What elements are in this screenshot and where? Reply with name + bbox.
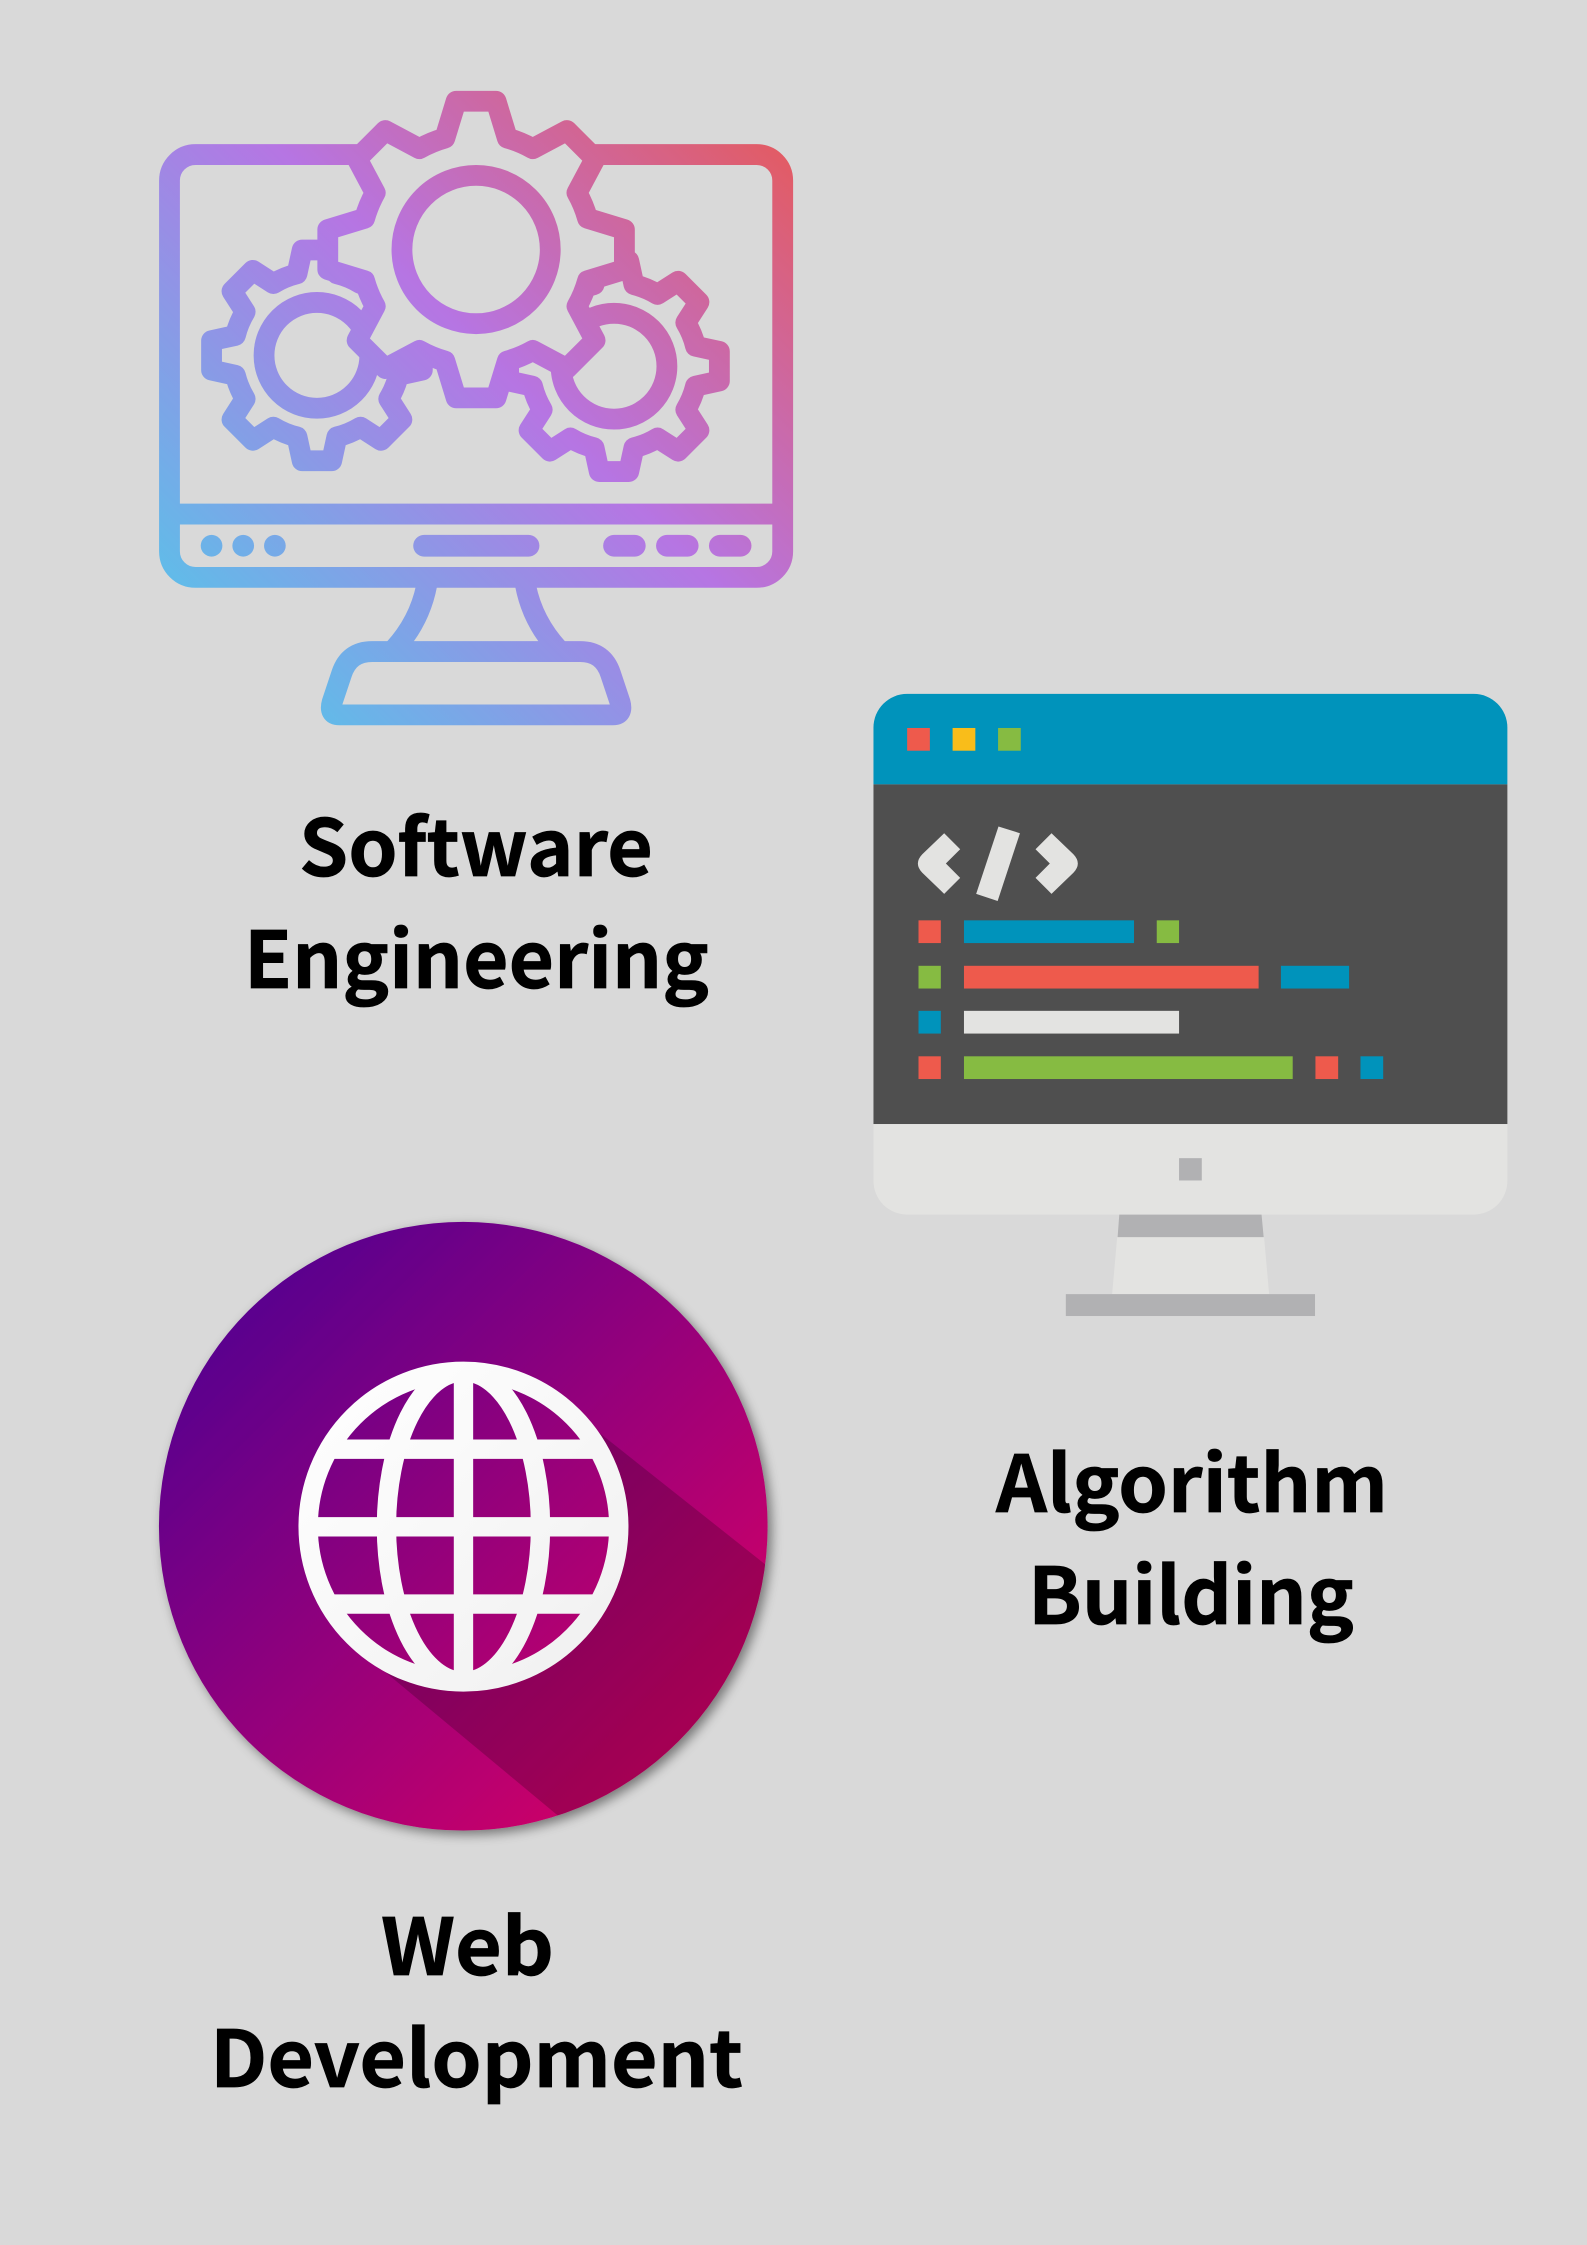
heading: Software Engineering: Engineering xyxy=(244,899,709,1011)
long shadow xyxy=(386,1432,765,1816)
icon: code editor monitor xyxy=(873,694,1507,1316)
icon: globe badge xyxy=(159,1222,797,1836)
power button xyxy=(1179,1158,1202,1180)
base xyxy=(1066,1294,1315,1316)
globe interior xyxy=(308,1371,619,1682)
heading: Software Engineering xyxy=(244,787,709,1011)
code symbol xyxy=(918,826,1078,901)
heading: Web Development: Development xyxy=(210,1998,743,2110)
heading: Software Engineering: Software xyxy=(299,787,653,899)
icon: monitor with gears xyxy=(159,90,794,726)
heading: Algorithm Building xyxy=(995,1423,1388,1647)
code lines xyxy=(919,920,1383,1079)
heading: Web Development xyxy=(210,1886,743,2110)
window buttons xyxy=(907,728,1021,751)
heading: Algorithm Building: Algorithm xyxy=(995,1423,1388,1535)
disc xyxy=(159,1222,768,1831)
heading: Web Development: Web xyxy=(381,1886,554,1998)
monitor chin xyxy=(873,1124,1507,1215)
neck xyxy=(1112,1215,1269,1294)
title bar xyxy=(873,694,1507,784)
code screen xyxy=(873,784,1507,1124)
heading: Algorithm Building: Building xyxy=(1028,1535,1354,1647)
globe xyxy=(300,1364,628,1688)
